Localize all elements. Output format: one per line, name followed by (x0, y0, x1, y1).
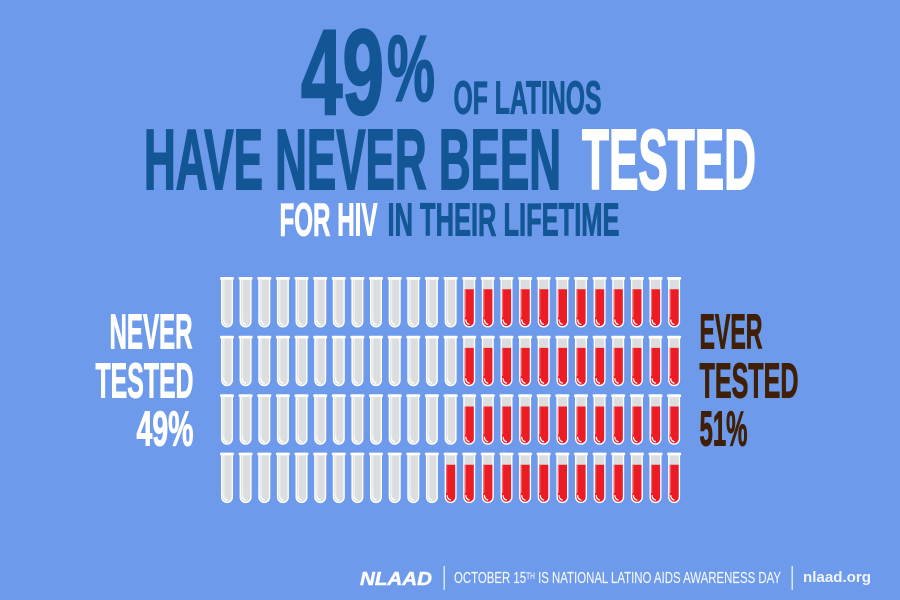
tube row 2 (220, 336, 681, 386)
tube row 4 (220, 453, 681, 503)
label: never tested 49% (96, 306, 194, 456)
title (144, 4, 756, 246)
label: ever tested 51%: EVER (700, 306, 762, 360)
tube row 1 (220, 277, 681, 328)
subheading: for HIV: FOR HIV (280, 194, 378, 246)
heading: of Latinos: OF LATINOS (454, 72, 602, 124)
logo: NLAAD: NLAAD (360, 569, 432, 589)
text: NEVER (110, 306, 192, 360)
footer message: OCTOBER 15 (454, 570, 552, 587)
label: ever tested 51% (700, 306, 798, 456)
big statistic 49%: 49 (301, 4, 384, 140)
subheading: in their lifetime: IN THEIR LIFETIME (388, 194, 620, 246)
footer (360, 566, 871, 590)
label: ever tested 51%: 51% (700, 402, 748, 456)
footer message: IS NATIONAL LATINO AIDS AWARENESS DAY (535, 570, 781, 587)
tube row 3 (220, 394, 681, 445)
label: never tested 49%: 49% (136, 402, 194, 456)
test tube chart (220, 277, 681, 503)
footer url: nlaad.org (803, 569, 871, 586)
big statistic 49%: % (387, 16, 435, 121)
label: never tested 49%: TESTED (96, 354, 194, 408)
label: ever tested 51%: TESTED (700, 354, 798, 408)
footer message: TH (526, 571, 535, 581)
